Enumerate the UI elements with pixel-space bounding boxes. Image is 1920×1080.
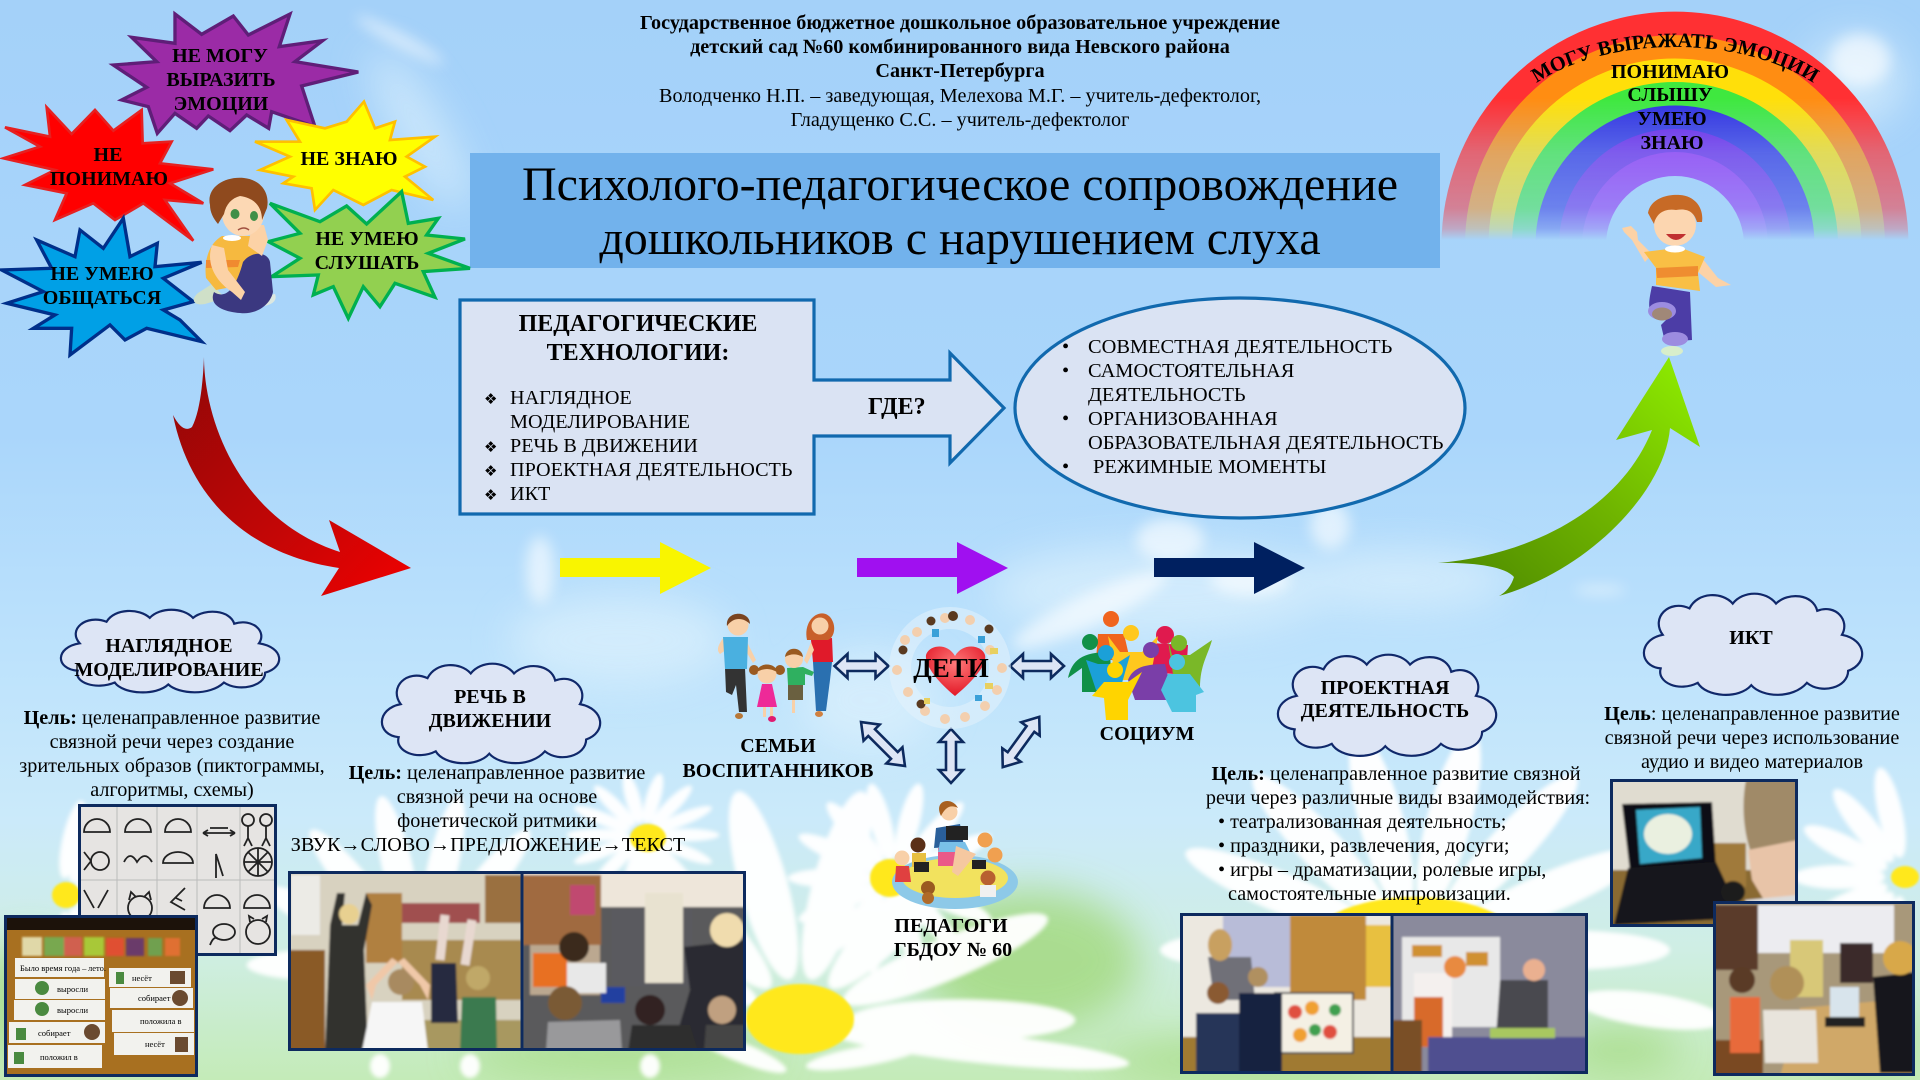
cloud: project activity: ПРОЕКТНАЯ xyxy=(1321,677,1450,699)
header: organisation and authors: Государственное бюджетное дошкольное образовательное учреждение xyxy=(640,12,1280,34)
list of technologies: НАГЛЯДНОЕ xyxy=(510,387,632,409)
text: ICT goal: связной речи через использование xyxy=(1605,727,1899,749)
starburst: не умею слушать: НЕ УМЕЮ xyxy=(315,228,419,250)
rainbow: ПОНИМАЮ xyxy=(1611,61,1729,83)
photo: child at laptop xyxy=(1610,779,1798,927)
ellipse: where: САМОСТОЯТЕЛЬНАЯ xyxy=(1088,360,1295,382)
list of technologies: ИКТ xyxy=(510,483,550,505)
label: society: СОЦИУМ xyxy=(1100,723,1194,745)
cloud: ICT xyxy=(1644,594,1862,695)
header: organisation and authors: Володченко Н.П. – заведующая, Мелехова М.Г. – учитель-дефектолог, xyxy=(659,85,1261,107)
photo: pictogram sheet xyxy=(80,806,276,954)
text: ICT goal: аудио и видео материалов xyxy=(1641,751,1863,773)
text: visual modelling goal: зрительных образов (пиктограммы, xyxy=(19,755,325,777)
cloud: project activity xyxy=(1278,655,1496,756)
rainbow: ЗНАЮ xyxy=(1640,132,1704,154)
callout arrow: pedagogical technologies: ТЕХНОЛОГИИ: xyxy=(547,340,729,366)
starburst: не умею слушать xyxy=(268,192,470,318)
label: teachers: ГБДОУ № 60 xyxy=(894,939,1012,961)
photo: word and picture cards: положила в xyxy=(140,1016,182,1026)
starburst: не понимаю: ПОНИМАЮ xyxy=(50,168,168,190)
question label: ГДЕ? xyxy=(868,394,926,420)
text: visual modelling goal: алгоритмы, схемы) xyxy=(90,779,254,801)
double arrow: society to teachers xyxy=(994,710,1048,774)
icon: children ring with heart: ДЕТИ xyxy=(913,653,989,683)
ellipse: where: • xyxy=(1062,408,1069,430)
photo: word and picture cards: собирает xyxy=(138,993,171,1003)
icon: society people xyxy=(1068,611,1212,720)
label: teachers: ПЕДАГОГИ xyxy=(894,915,1008,937)
starburst: не понимаю: НЕ xyxy=(94,144,122,166)
ellipse: where: ДЕЯТЕЛЬНОСТЬ xyxy=(1088,384,1246,406)
text: speech goal xyxy=(291,762,685,856)
rainbow: СЛЫШУ xyxy=(1627,84,1713,106)
ellipse: where: • xyxy=(1062,360,1069,382)
list of technologies: ❖ xyxy=(484,486,497,504)
text: speech goal: Цель: целенаправленное развитие xyxy=(349,762,645,784)
ellipse: where: РЕЖИМНЫЕ МОМЕНТЫ xyxy=(1093,456,1327,478)
photo: word and picture cards: выросли xyxy=(57,1005,88,1015)
starburst: не могу выразить эмоции: ВЫРАЗИТЬ xyxy=(166,69,276,91)
cloud: visual modelling xyxy=(61,610,279,692)
starburst: не умею общаться: НЕ УМЕЮ xyxy=(50,263,154,285)
double arrow: families to teachers xyxy=(853,714,913,774)
callout arrow: pedagogical technologies xyxy=(460,300,1004,514)
double arrow: teachers to children xyxy=(939,729,963,783)
ellipse: where: ОРГАНИЗОВАННАЯ xyxy=(1088,408,1278,430)
icon: happy boy xyxy=(1622,195,1731,356)
starburst: не умею общаться xyxy=(2,218,202,355)
arrow: navy xyxy=(1154,542,1305,594)
photo: word and picture cards: несёт xyxy=(132,973,152,983)
starburst: не умею слушать: СЛУШАТЬ xyxy=(315,252,419,274)
header: organisation and authors: детский сад №60 комбинированного вида Невского района xyxy=(690,36,1230,58)
starburst: не понимаю xyxy=(3,107,213,241)
cloud: project activity: ДЕЯТЕЛЬНОСТЬ xyxy=(1301,700,1469,722)
list of technologies: ❖ xyxy=(484,390,497,408)
cloud: speech in movement xyxy=(382,664,600,763)
cloud: speech in movement: ДВИЖЕНИИ xyxy=(429,710,552,732)
double arrow: children to society xyxy=(1010,654,1064,678)
photo: word and picture cards: лето. xyxy=(88,963,106,973)
title banner: дошкольников с нарушением слуха xyxy=(599,212,1321,265)
text: visual modelling goal xyxy=(19,707,325,801)
cloud: speech in movement: РЕЧЬ В xyxy=(454,686,526,708)
header: organisation and authors: Гладущенко С.С. – учитель-дефектолог xyxy=(791,109,1129,131)
starburst: не знаю xyxy=(255,102,435,210)
label: families: СЕМЬИ xyxy=(740,735,816,757)
double arrow: families to children xyxy=(834,654,888,678)
arrow: curved green xyxy=(1438,357,1700,596)
cloud: visual modelling: НАГЛЯДНОЕ xyxy=(105,635,233,657)
cloud: ICT: ИКТ xyxy=(1729,627,1773,649)
callout arrow: pedagogical technologies: ПЕДАГОГИЧЕСКИЕ xyxy=(519,311,757,337)
text: ICT goal: Цель: целенаправленное развитие xyxy=(1604,703,1900,725)
list of technologies xyxy=(484,387,792,505)
starburst: не могу выразить эмоции xyxy=(113,14,358,133)
ellipse: where xyxy=(1015,298,1465,518)
icon: family xyxy=(718,613,834,722)
rainbow xyxy=(1442,12,1908,264)
list of technologies: МОДЕЛИРОВАНИЕ xyxy=(510,411,690,433)
list of technologies: ❖ xyxy=(484,438,497,456)
photo: word and picture cards: Было время года – xyxy=(20,963,87,973)
list of technologies: ❖ xyxy=(484,462,497,480)
arrow: yellow xyxy=(560,542,711,594)
text: project goal: • праздники, развлечения, досуги; xyxy=(1218,835,1509,857)
icon: sad boy xyxy=(194,178,276,313)
icon: children ring with heart xyxy=(892,611,1007,724)
text: project goal: самостоятельные импровизации. xyxy=(1228,883,1511,905)
label: teachers xyxy=(894,915,1012,961)
ellipse: where: • xyxy=(1062,336,1069,358)
photo: children with teacher at table xyxy=(1713,901,1917,1076)
title banner: Психолого-педагогическое сопровождение xyxy=(522,158,1398,211)
starburst: не умею общаться: ОБЩАТЬСЯ xyxy=(43,287,162,309)
photo: word and picture cards xyxy=(6,916,196,1076)
starburst: не могу выразить эмоции: ЭМОЦИИ xyxy=(174,93,269,115)
header: organisation and authors: Санкт-Петербурга xyxy=(875,60,1045,82)
starbursts: difficulties xyxy=(2,14,470,355)
text: project goal: • игры – драматизации, ролевые игры, xyxy=(1218,859,1546,881)
header: organisation and authors xyxy=(640,12,1280,131)
ellipse: where: СОВМЕСТНАЯ ДЕЯТЕЛЬНОСТЬ xyxy=(1088,336,1393,358)
cloud: visual modelling: МОДЕЛИРОВАНИЕ xyxy=(74,659,264,681)
icon: teacher with children on mat xyxy=(892,801,1018,909)
photo pair: project activity xyxy=(1180,913,1588,1074)
arrow: purple xyxy=(857,542,1008,594)
text: ICT goal xyxy=(1604,703,1900,773)
text: project goal: речи через различные виды взаимодействия: xyxy=(1206,787,1590,809)
photo: word and picture cards: положил в xyxy=(40,1052,78,1062)
text: visual modelling goal: связной речи через создание xyxy=(50,731,294,753)
starburst: не могу выразить эмоции: НЕ МОГУ xyxy=(172,45,268,67)
text: speech goal: ЗВУК→СЛОВО→ПРЕДЛОЖЕНИЕ→ТЕКСТ xyxy=(291,834,685,856)
text: speech goal: фонетической ритмики xyxy=(397,810,597,832)
label: families: ВОСПИТАННИКОВ xyxy=(682,760,874,782)
text: project goal: Цель: целенаправленное развитие связной xyxy=(1211,763,1581,785)
photo: word and picture cards: несёт xyxy=(145,1039,165,1049)
title banner xyxy=(470,153,1440,268)
text: visual modelling goal: Цель: целенаправленное развитие xyxy=(24,707,320,729)
photo: word and picture cards: собирает xyxy=(38,1028,71,1038)
rainbow: МОГУ ВЫРАЖАТЬ ЭМОЦИИ xyxy=(1530,34,1820,83)
photo pair: phonetic rhythmics xyxy=(288,871,746,1051)
starburst: не знаю: НЕ ЗНАЮ xyxy=(301,148,397,170)
list of technologies: ПРОЕКТНАЯ ДЕЯТЕЛЬНОСТЬ xyxy=(510,459,792,481)
ellipse: where: • xyxy=(1062,456,1069,478)
label: families xyxy=(682,735,874,782)
rainbow: УМЕЮ xyxy=(1637,108,1707,130)
arrow: curved red xyxy=(173,357,411,596)
photo: word and picture cards: выросли xyxy=(57,984,88,994)
ellipse: where: ОБРАЗОВАТЕЛЬНАЯ ДЕЯТЕЛЬНОСТЬ xyxy=(1088,432,1444,454)
text: speech goal: связной речи на основе xyxy=(397,786,597,808)
list of technologies: РЕЧЬ В ДВИЖЕНИИ xyxy=(510,435,698,457)
text: project goal xyxy=(1206,763,1590,905)
text: project goal: • театрализованная деятельность; xyxy=(1218,811,1506,833)
